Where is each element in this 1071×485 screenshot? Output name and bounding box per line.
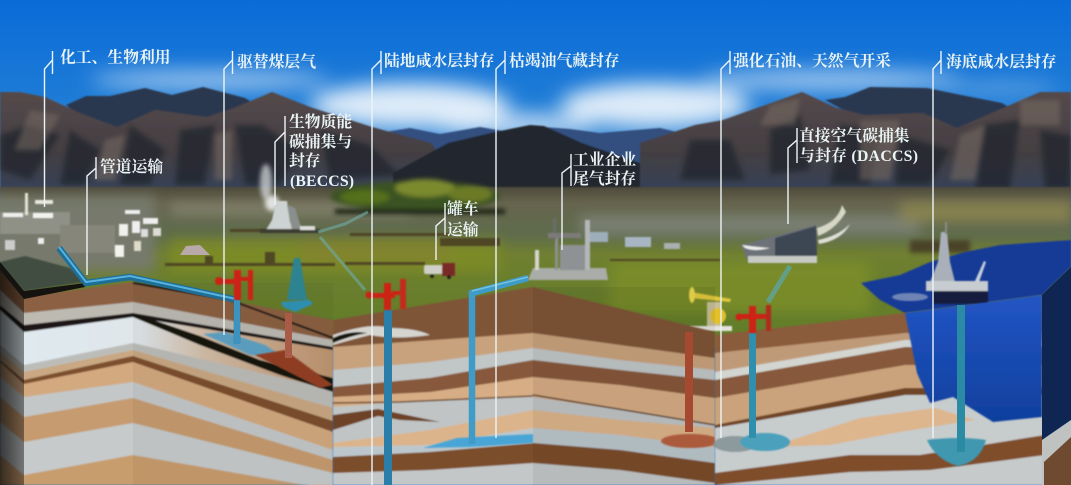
well: subsea injector xyxy=(957,305,965,452)
callout: onshore saline aquifer: 陆地咸水层封存 xyxy=(384,51,495,70)
saline aquifer plume xyxy=(423,434,533,448)
back left range xyxy=(66,87,290,150)
callout: BECCS: 生物质能 xyxy=(289,112,352,131)
brown wedge xyxy=(333,409,440,430)
grassland xyxy=(0,187,1071,347)
callout: tanker transport: 罐车 xyxy=(447,199,479,218)
icon: pumpjack xyxy=(689,287,732,331)
callout: subsea saline aquifer xyxy=(933,51,1057,438)
pipeline and well: depleted gas reservoir xyxy=(472,277,528,444)
callout: industrial exhaust storage: 尾气封存 xyxy=(573,169,636,188)
icon: red wellhead 2 xyxy=(366,279,406,310)
mist bands xyxy=(170,202,1071,312)
callout: tanker transport: 运输 xyxy=(447,220,479,239)
mountains xyxy=(0,87,1071,195)
geological strata: left block xyxy=(0,268,333,485)
callout: industrial exhaust storage xyxy=(562,150,636,250)
callout: subsea saline aquifer: 海底咸水层封存 xyxy=(946,52,1057,71)
fences and field rows xyxy=(165,229,720,266)
far blue range xyxy=(385,126,690,170)
callout: DACCS: 与封存 (DACCS) xyxy=(799,146,918,165)
well: oil producer xyxy=(685,332,693,432)
surface black line xyxy=(133,283,333,338)
clouds xyxy=(90,71,1060,135)
callout: BECCS: (BECCS) xyxy=(290,173,354,190)
well: coal bed injector xyxy=(234,300,240,344)
right side of block xyxy=(1042,267,1071,440)
ridge shadows xyxy=(0,115,1071,190)
callout: pipeline transport: 管道运输 xyxy=(100,157,163,176)
coal bed CO2 plume xyxy=(203,332,285,358)
icon: red wellhead 3 xyxy=(736,305,771,333)
left side shading xyxy=(0,268,24,485)
callout: EOR and gas recovery xyxy=(721,51,891,438)
CO2 transport lines on grassland xyxy=(318,212,790,302)
coal seam xyxy=(133,313,333,392)
callout: ECBM xyxy=(224,51,316,335)
icon: industrial plant xyxy=(528,218,680,280)
sky xyxy=(0,0,1071,195)
factory complex xyxy=(0,193,161,291)
yurt xyxy=(180,245,210,255)
callout: tanker transport xyxy=(436,199,479,260)
white lens xyxy=(333,326,430,345)
ocean surface xyxy=(861,240,1071,313)
callout: depleted reservoirs xyxy=(496,51,620,438)
back right range xyxy=(825,87,1010,130)
methane deposit xyxy=(255,350,333,388)
icon: tanker truck xyxy=(424,263,455,279)
callout: DACCS xyxy=(788,126,918,224)
well: EOR injector xyxy=(749,333,756,438)
geological strata: centre block xyxy=(333,287,715,485)
methane deposit 2 xyxy=(661,434,719,448)
callout: pipeline transport xyxy=(87,157,163,275)
well: onshore saline aquifer xyxy=(384,310,392,485)
callout: chemical and biological use xyxy=(44,48,171,207)
callout: BECCS xyxy=(275,112,354,205)
tree cluster xyxy=(330,179,505,214)
pipeline: transport xyxy=(59,247,237,343)
callout: onshore saline aquifer xyxy=(372,51,495,485)
callout: depleted reservoirs: 枯竭油气藏封存 xyxy=(509,51,620,70)
icon: red wellhead 1 xyxy=(215,270,253,300)
central dark mountain xyxy=(393,125,682,195)
tan lens xyxy=(770,408,975,447)
geological strata: right block xyxy=(715,313,1045,485)
callout: chemical and biological use: 化工、生物利用 xyxy=(60,48,171,66)
callout: DACCS: 直接空气碳捕集 xyxy=(799,126,910,145)
aquifer plumes xyxy=(713,433,986,466)
callout: BECCS: 碳捕集与 xyxy=(289,132,352,151)
icon: teal drilling derrick xyxy=(281,258,313,312)
front right mountain xyxy=(640,92,1071,195)
well: methane producer xyxy=(285,313,292,358)
icon: offshore platform xyxy=(892,222,988,304)
callout: EOR and gas recovery: 强化石油、天然气开采 xyxy=(733,51,891,70)
callout: industrial exhaust storage: 工业企业 xyxy=(573,150,636,169)
front left mountain xyxy=(0,92,470,195)
callout: BECCS: 封存 xyxy=(289,151,321,170)
callout: ECBM: 驱替煤层气 xyxy=(237,52,316,71)
icon: BECCS cooling tower with steam xyxy=(260,164,320,233)
icon: direct air capture unit xyxy=(741,205,850,263)
shoreline structures xyxy=(910,240,970,253)
seawater body xyxy=(905,295,1042,422)
